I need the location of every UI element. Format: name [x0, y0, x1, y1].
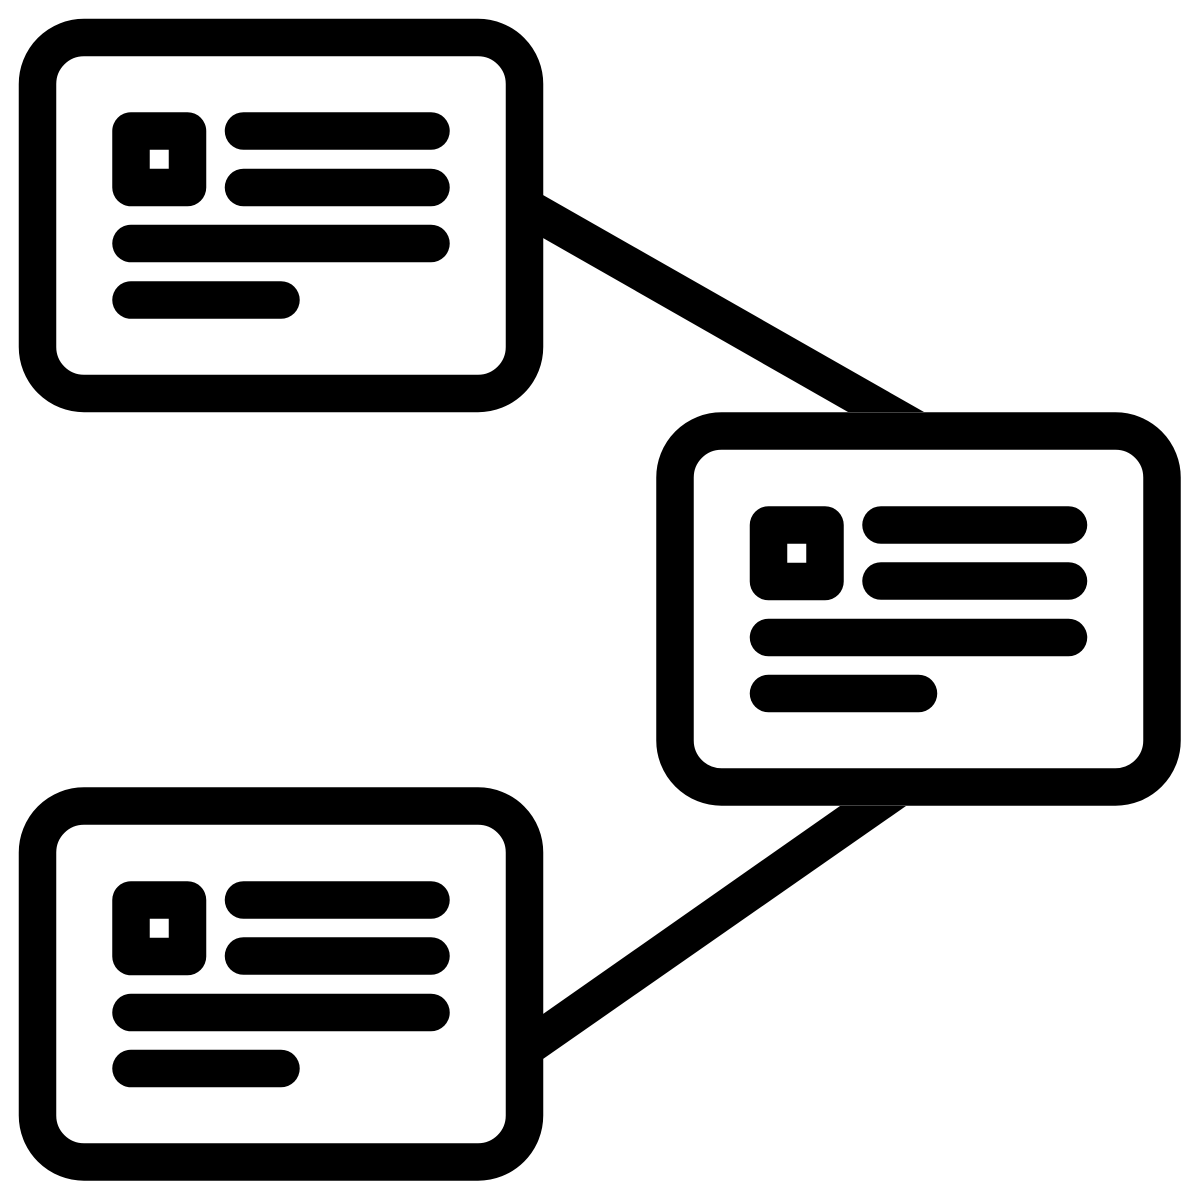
text line 2	[881, 562, 1068, 600]
text line 2	[244, 169, 431, 206]
text line 3	[768, 619, 1068, 656]
text line 3	[131, 225, 431, 262]
text line 2	[244, 937, 431, 975]
text line 4	[131, 1050, 281, 1087]
connector: top card to middle card	[543, 195, 924, 412]
text line 1	[244, 881, 431, 919]
icon: square thumbnail	[131, 131, 188, 188]
card: bottom left	[38, 806, 524, 1162]
text line 1	[244, 112, 431, 150]
text line 4	[131, 281, 281, 319]
text line 4	[768, 675, 918, 712]
icon: square thumbnail	[131, 900, 188, 956]
text line 1	[881, 506, 1068, 544]
card: middle right	[675, 431, 1162, 787]
card: top left	[38, 38, 524, 394]
connector: bottom card to middle card	[543, 806, 906, 1059]
icon: square thumbnail	[768, 525, 825, 582]
text line 3	[131, 994, 431, 1031]
